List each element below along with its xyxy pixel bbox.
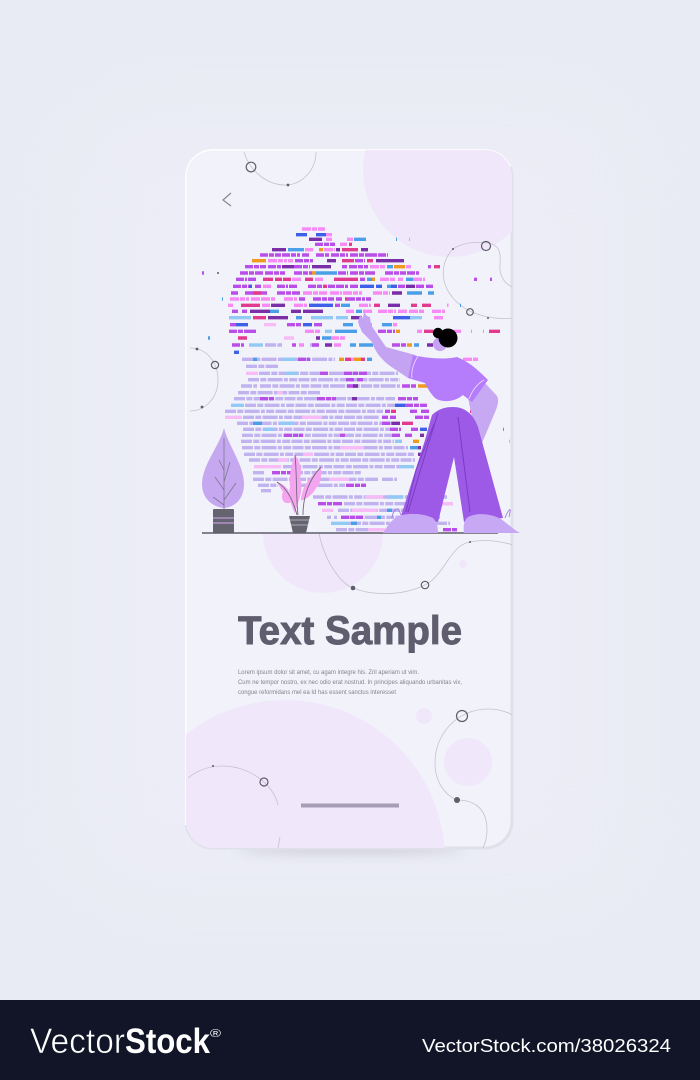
background glow — [90, 120, 610, 880]
logo: VectorStock: ® — [210, 1028, 221, 1040]
shirt — [408, 355, 488, 402]
face — [433, 337, 447, 351]
footer band — [0, 1000, 700, 1080]
plant: leaf in grey pot — [202, 428, 244, 533]
body text block — [238, 669, 462, 696]
logo: VectorStock: Stock — [125, 1022, 210, 1061]
decorative orbit lines and nodes — [188, 152, 513, 848]
raised arm and hand — [358, 312, 415, 378]
plant: pink leaves in striped pot — [277, 455, 321, 533]
home indicator bar — [301, 804, 399, 808]
body text block: congue reformidans mel ea Id has essent sanctus interesset — [238, 689, 396, 696]
data visualization: coloured code bars — [202, 229, 510, 530]
shelf line — [202, 532, 498, 534]
logo: VectorStock — [30, 1022, 221, 1061]
body text block: Lorem ipsum dolor sit amet, cu agam integre his. Zril aperiam ut vim. — [238, 669, 419, 676]
icon: back chevron — [223, 193, 231, 206]
title: Text Sample — [238, 609, 462, 653]
panel: phone screen — [186, 150, 512, 848]
logo: VectorStock: Vector — [30, 1022, 125, 1061]
image id: VectorStock.com/38026324 — [422, 1035, 671, 1056]
phone shadow — [235, 845, 465, 853]
body text block: Cum ne tempor nostro, ex nec odio erat nostrud. In principes aliquando urbanitas vix, — [238, 679, 462, 686]
character: woman pointing at the data — [358, 312, 520, 533]
pale background circles — [186, 150, 512, 848]
back arm — [468, 383, 498, 443]
trousers — [401, 407, 503, 522]
shoes and laces — [383, 509, 520, 533]
hair — [433, 328, 458, 348]
